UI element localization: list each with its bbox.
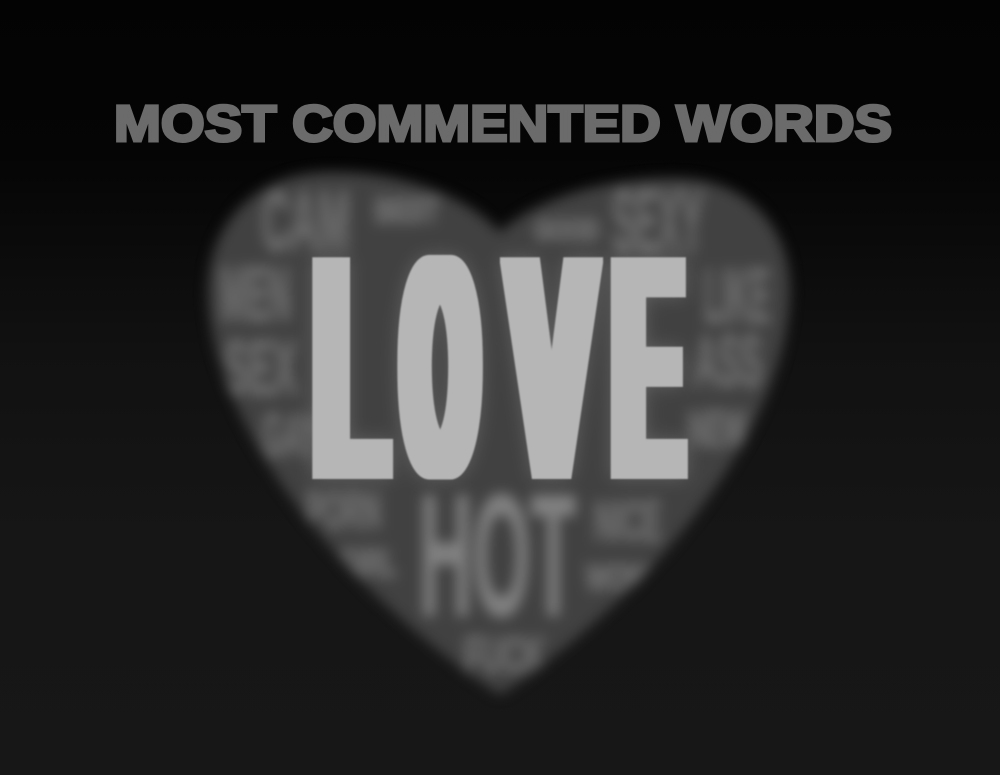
blurred words: NICE: [594, 491, 661, 553]
blurred words: GIRL: [340, 541, 396, 584]
blurred words: LIKE: [704, 255, 770, 339]
blurred words: NEW: [688, 402, 747, 457]
glow behind LOVE: E: [614, 191, 681, 544]
heart shape: [208, 172, 790, 695]
letter V: V: [510, 192, 594, 543]
blurred words: BEST: [375, 192, 439, 230]
blurred words: FUCK: [464, 627, 545, 683]
glow behind LOVE: L: [315, 193, 386, 544]
blurred words: GOOD: [535, 215, 599, 247]
blurred words: GAY: [262, 402, 319, 469]
blurred words: CAM: [262, 174, 350, 268]
word: HOT: HOT: [419, 459, 576, 653]
title: MOST COMMENTED WORDS: [114, 95, 892, 152]
blurred words: MEN: [220, 252, 291, 337]
heart word cloud: [208, 171, 790, 695]
glow behind LOVE: V: [510, 192, 594, 543]
blurred words: SEXY: [612, 171, 703, 272]
glow behind LOVE: O: [404, 194, 476, 540]
blurred words: PORN: [306, 481, 381, 539]
blurred words: ASS: [694, 320, 762, 401]
glow behind LOVE: [315, 191, 681, 544]
blurred words: WOW: [586, 558, 649, 598]
blurred words: [220, 171, 770, 683]
blurred words: SEX: [224, 325, 297, 411]
letter E: E: [614, 191, 681, 544]
letter O: O: [404, 194, 476, 540]
word: LOVE: [315, 191, 681, 544]
letter L: L: [315, 193, 386, 544]
